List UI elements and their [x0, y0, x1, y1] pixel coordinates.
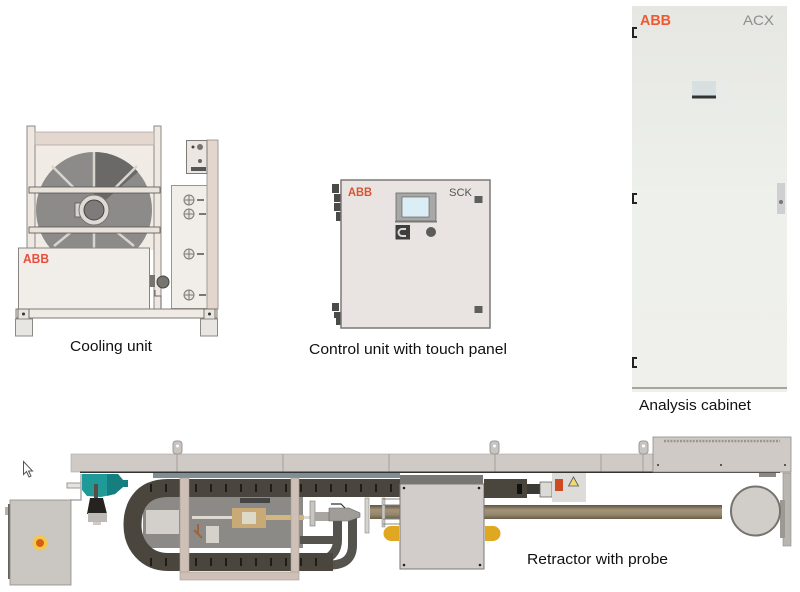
probe valve assembly	[192, 498, 322, 543]
carriage box	[400, 475, 484, 569]
housing rail	[71, 454, 780, 473]
short chain right of carriage	[484, 479, 552, 498]
upper hinge	[332, 184, 341, 221]
fan wheel	[36, 152, 152, 248]
indicator knob	[426, 227, 436, 237]
label: retractor with probe: Retractor with probe	[527, 551, 668, 568]
teal drive motor	[67, 474, 128, 525]
enclosure	[341, 180, 490, 328]
vertical carrier posts	[180, 478, 299, 580]
valve	[150, 275, 169, 308]
touch panel	[395, 193, 437, 222]
chain link marks	[150, 488, 400, 562]
rear housing	[653, 437, 791, 472]
mouse cursor	[24, 462, 32, 477]
probe tube	[370, 505, 722, 519]
main switch	[396, 225, 410, 240]
fan hub	[75, 195, 109, 225]
probe flange and coupling	[310, 498, 400, 533]
cabinet base strip	[632, 387, 787, 389]
ABB logo: ABB	[640, 13, 671, 29]
probe end disc	[731, 486, 780, 536]
display	[691, 80, 727, 104]
hinges	[632, 27, 637, 368]
lower hinge	[332, 303, 341, 325]
control box with indicator	[5, 500, 71, 585]
flexible hoses	[324, 518, 352, 565]
label: control unit: Control unit with touch panel	[309, 341, 507, 358]
switch panel	[186, 140, 207, 174]
heat exchanger fittings	[184, 195, 206, 300]
blue-grey guide strip	[153, 473, 400, 478]
cabinet door	[632, 6, 787, 392]
upper lock	[474, 196, 482, 203]
carrier back plate	[143, 497, 333, 548]
mounting eye 3	[639, 441, 648, 454]
ACX label: ACX	[743, 12, 775, 28]
analysis cabinet	[632, 6, 787, 392]
label: analysis cabinet: Analysis cabinet	[639, 397, 752, 414]
base frame and feet	[16, 309, 218, 336]
door handle	[777, 183, 785, 214]
right column	[172, 140, 218, 309]
mounting eye 1	[173, 441, 182, 454]
mounting eye 2	[490, 441, 499, 454]
frame posts and back panel	[27, 126, 161, 310]
warning junction box	[552, 473, 586, 502]
cooling unit	[16, 126, 218, 336]
retractor with probe	[5, 437, 791, 585]
ABB logo: ABB	[348, 185, 372, 199]
yellow bumper right	[485, 526, 501, 541]
yellow bumper left	[384, 526, 399, 541]
ABB logo: ABB	[23, 251, 49, 266]
control unit	[332, 180, 490, 328]
label: cooling unit: Cooling unit	[70, 338, 153, 355]
compressor box	[18, 248, 150, 309]
SCK label: SCK	[449, 187, 473, 199]
cable chain	[132, 488, 400, 562]
lower lock	[474, 306, 482, 313]
rear bracket	[759, 473, 791, 546]
frame cross bars	[29, 187, 160, 233]
